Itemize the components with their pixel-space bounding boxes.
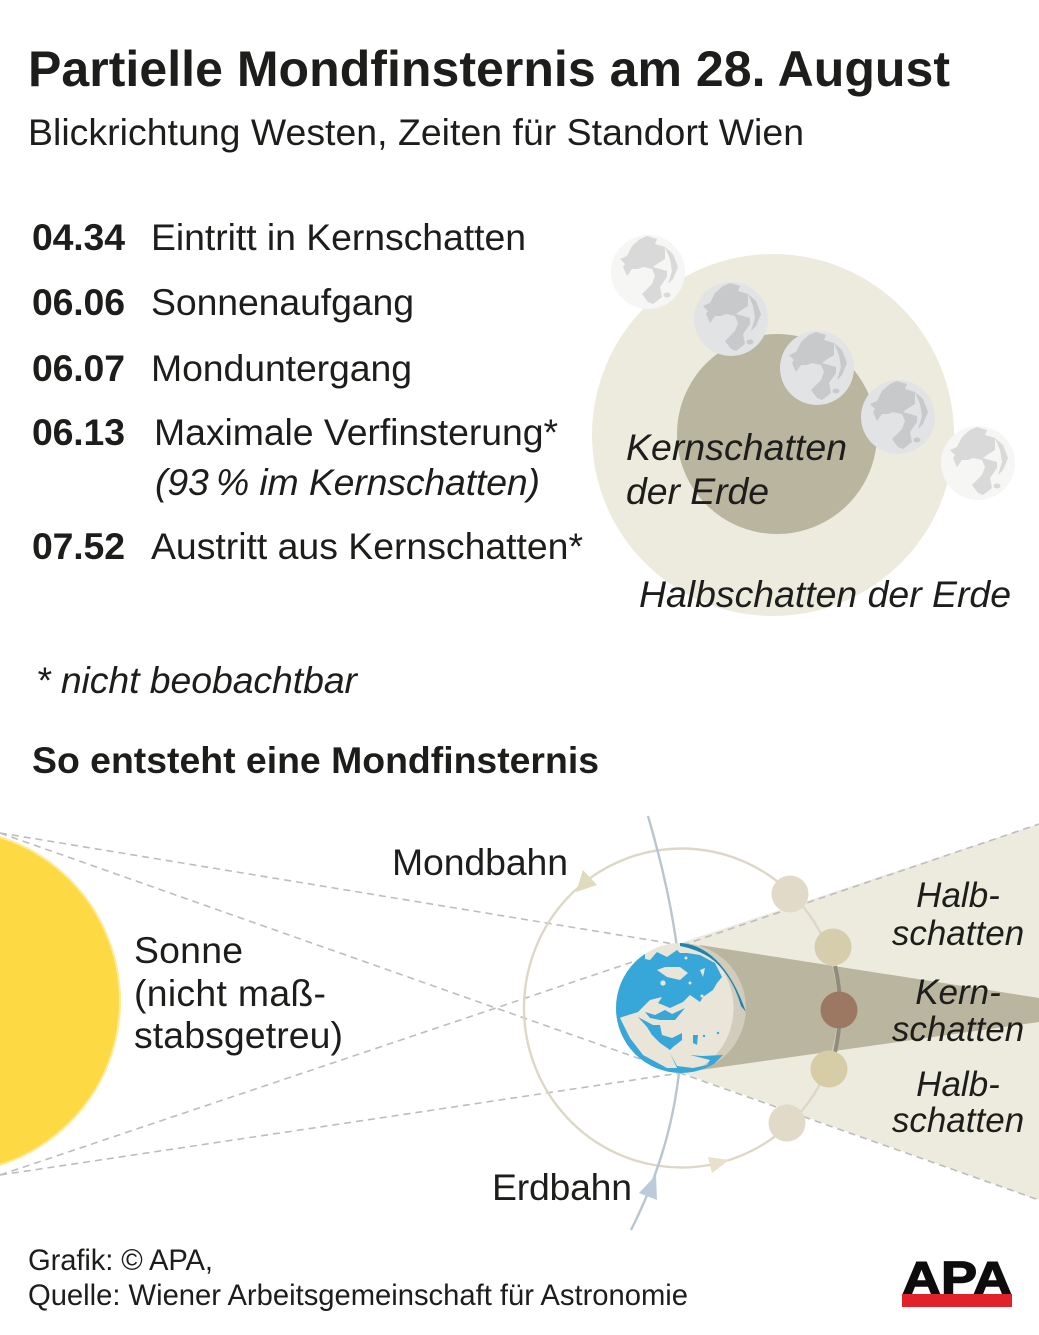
subtitle: Blickrichtung Westen, Zeiten für Standort Wien	[28, 111, 804, 153]
moon positions	[768, 876, 858, 1142]
APA logo: APA	[902, 1252, 1012, 1304]
label: umbra	[892, 973, 1024, 1049]
label: lower penumbra	[892, 1065, 1024, 1140]
explanation diagram	[0, 816, 1039, 1230]
light rays	[0, 824, 1039, 1200]
row: 06.06	[32, 281, 414, 323]
day side	[616, 942, 734, 1074]
land: north	[657, 967, 688, 980]
label: sun: Sonne	[134, 929, 243, 971]
penumbra cone	[680, 824, 1039, 1200]
row: 06.06: 06.06	[32, 281, 125, 323]
row: 07.52: 07.52	[32, 525, 125, 567]
sun	[0, 829, 120, 1173]
moon orbit	[524, 848, 840, 1173]
row: 07.52: Austritt aus Kernschatten*	[151, 525, 583, 567]
label: umbra: der Erde	[626, 470, 769, 512]
eclipse path diagram	[592, 235, 1015, 616]
row: 04.34: 04.34	[32, 216, 125, 258]
label: umbra: Kernschatten	[626, 426, 847, 468]
umbra cone	[700, 945, 1039, 1070]
row: 06.07	[32, 347, 412, 389]
title: Partielle Mondfinsternis am 28. August	[28, 41, 950, 97]
label: sun: stabsgetreu)	[134, 1014, 343, 1056]
moon 4	[861, 380, 935, 454]
rim ocean top right	[680, 943, 746, 1012]
label: penumbra: Halbschatten der Erde	[639, 573, 1011, 615]
seas	[638, 1008, 719, 1050]
earth globe	[616, 943, 746, 1073]
moon 3	[780, 331, 854, 405]
earth orbit	[631, 816, 682, 1230]
source credit	[28, 1245, 688, 1312]
moon 5	[941, 426, 1015, 500]
row: 04.34: Eintritt in Kernschatten	[151, 216, 526, 258]
label: moon orbit: Mondbahn	[392, 841, 568, 883]
row: 06.13: Maximale Verfinsterung*	[154, 411, 558, 453]
label: upper penumbra	[892, 876, 1024, 953]
land: islands	[650, 956, 705, 1004]
moon 2	[694, 282, 768, 356]
label: upper penumbra: Halb-	[916, 876, 1000, 915]
section heading: So entsteht eine Mondfinsternis	[32, 739, 599, 781]
row: 06.06: Sonnenaufgang	[151, 281, 414, 323]
umbra disc	[677, 334, 877, 534]
label: earth orbit: Erdbahn	[492, 1166, 632, 1208]
row: 06.07: 06.07	[32, 347, 125, 389]
label: umbra	[626, 426, 847, 512]
source credit: Grafik: © APA,	[28, 1245, 213, 1277]
timetable	[32, 216, 583, 567]
night side	[646, 943, 746, 1066]
penumbra disc	[592, 254, 954, 616]
label: lower penumbra: schatten	[892, 1101, 1024, 1140]
moon 1	[611, 235, 685, 309]
main ocean	[616, 950, 723, 1073]
label: lower penumbra: Halb-	[916, 1065, 1000, 1104]
label: umbra: schatten	[892, 1010, 1024, 1049]
label: sun	[134, 929, 343, 1056]
label: sun: (nicht maß-	[134, 972, 326, 1014]
row: 06.07: Monduntergang	[151, 347, 412, 389]
row: 06.13: (93 % im Kernschatten)	[155, 461, 540, 503]
row: 06.13	[32, 411, 558, 503]
source credit: Quelle: Wiener Arbeitsgemeinschaft für Astronomie	[28, 1280, 688, 1312]
label: upper penumbra: schatten	[892, 914, 1024, 953]
footnote: * nicht beobachtbar	[36, 659, 359, 701]
row: 06.13: 06.13	[32, 411, 125, 453]
label: umbra: Kern-	[915, 973, 1001, 1012]
